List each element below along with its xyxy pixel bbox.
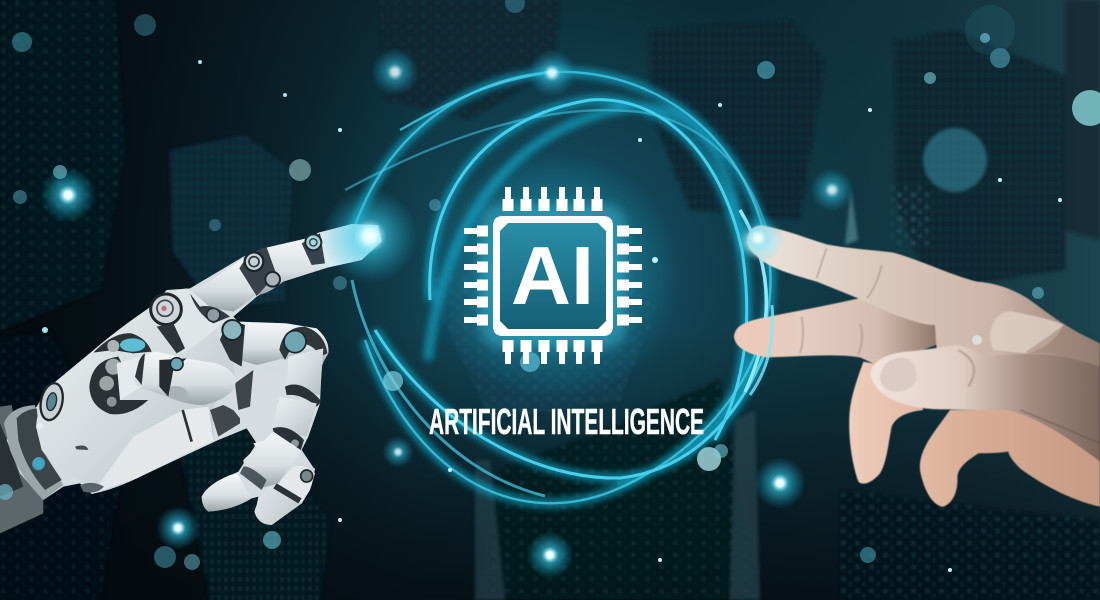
middle finger — [734, 298, 940, 367]
curled fingers — [202, 348, 323, 525]
index fingertip glow — [322, 188, 418, 284]
middle finger knuckle — [220, 320, 329, 367]
thumb — [135, 352, 236, 405]
fingertip highlight — [745, 228, 778, 255]
palm joints — [32, 333, 152, 493]
robot hand — [0, 224, 382, 533]
overlay dots on hands — [0, 335, 982, 500]
title: Artificial Intelligence: ARTIFICIAL INTELLIGENCE — [429, 401, 704, 442]
thumbnail — [880, 357, 917, 392]
lens flares — [40, 48, 854, 579]
wrist ring — [4, 405, 63, 500]
human hand — [734, 226, 1100, 507]
chip pins: bottom — [502, 340, 602, 364]
AI chip icon — [464, 187, 642, 364]
robot palm — [36, 288, 235, 494]
chip pins: top — [502, 187, 602, 211]
pinky and lower wrist — [920, 410, 1100, 507]
thumb — [871, 345, 1100, 462]
index finger — [192, 224, 382, 312]
ring overlay on middle finger — [750, 305, 773, 395]
robot silhouette — [7, 225, 382, 525]
index knuckle joint — [148, 290, 230, 353]
glow behind chip — [423, 150, 683, 400]
finger contact glow — [732, 212, 784, 264]
orbit rings — [345, 72, 771, 503]
chip pins: right — [617, 226, 642, 326]
robot arm and wrist — [0, 405, 43, 533]
ring finger — [849, 362, 923, 484]
chip label: AI: AI — [511, 229, 594, 322]
knuckle creases — [800, 248, 882, 355]
chip pins: left — [464, 226, 488, 326]
index finger and hand back — [747, 226, 1100, 443]
knuckle bump — [990, 311, 1063, 353]
